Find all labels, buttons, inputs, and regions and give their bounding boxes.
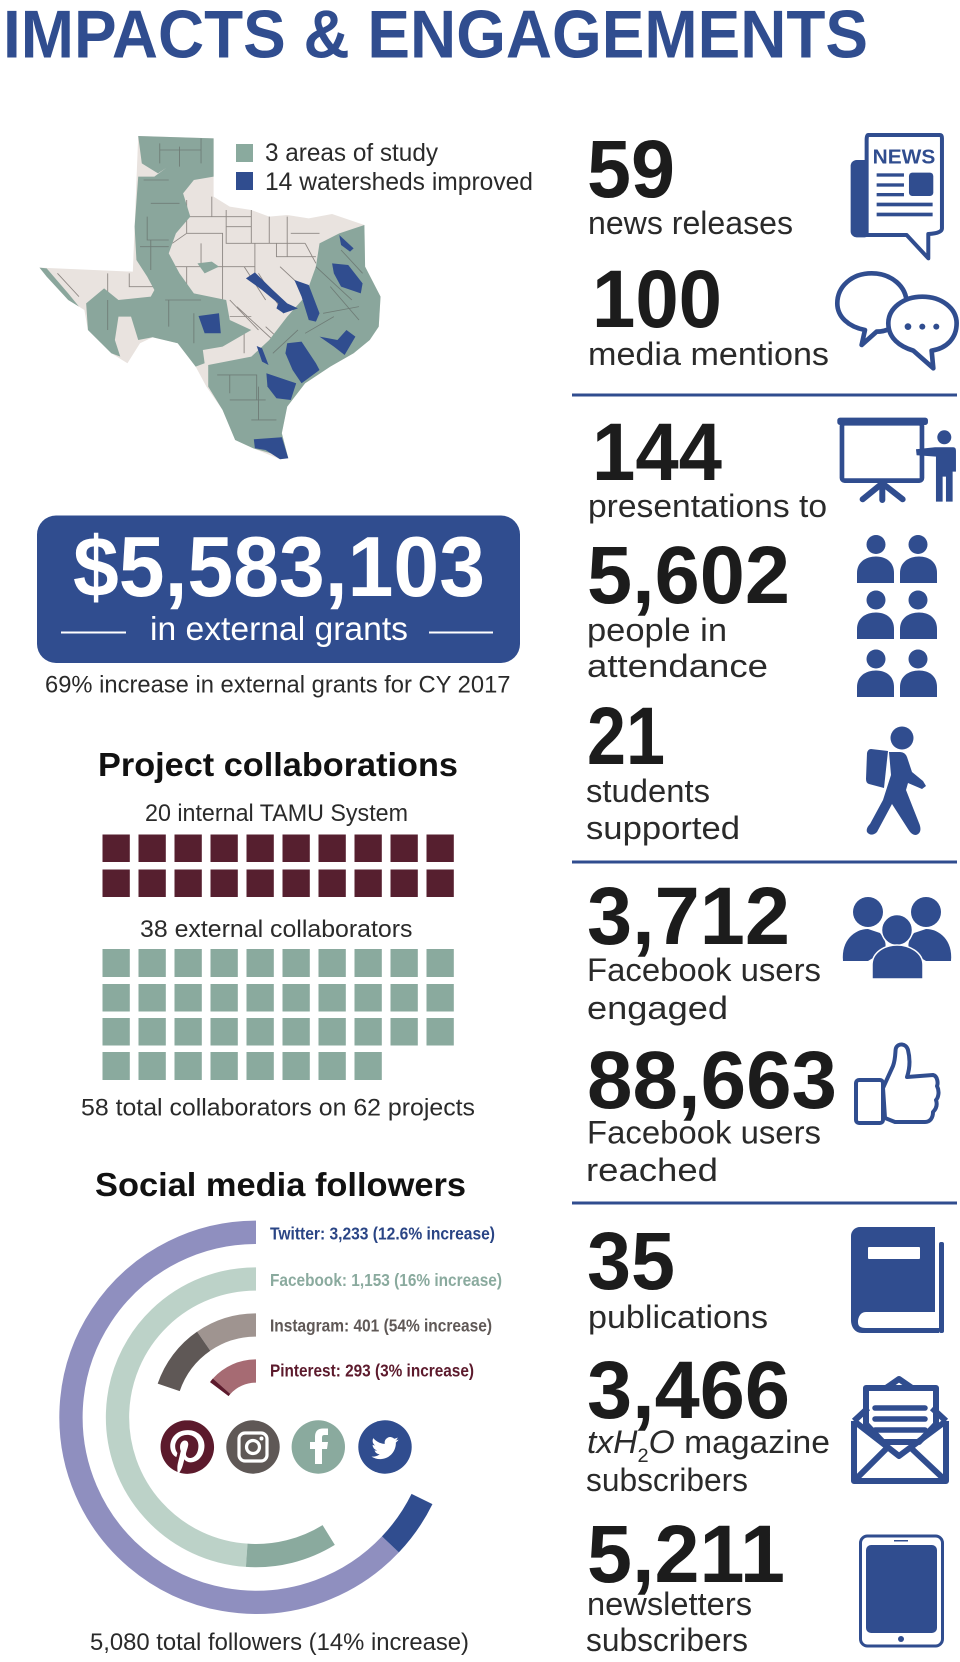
stat: magazine subscribers: O [649,1424,675,1460]
stat: publications: publications [588,1299,768,1335]
stat: Facebook users reached: Facebook users [587,1114,821,1150]
divider [572,394,957,396]
grants increase note: 69% increase in external grants for CY 2017 [45,672,510,698]
stat: attendance: people in [587,612,727,648]
icon: Pinterest [161,1420,214,1474]
label: Instagram followers: Instagram: 401 (54% increase) [270,1316,492,1336]
icon: open envelope with letter [854,1379,946,1481]
icon: newspaper: NEWS [873,145,935,168]
grants caption: in external grants [150,610,408,647]
icon: user group [843,897,951,979]
stat: Facebook users engaged [587,871,821,1026]
stat: attendance [587,530,790,684]
map: Texas areas of study and watersheds [39,136,533,459]
stat: publications: 35 [587,1216,675,1307]
stat: news releases [587,124,793,241]
stat: publications [587,1216,768,1335]
stat: attendance: 5,602 [587,530,790,621]
stat: magazine subscribers [586,1345,830,1498]
icon: Twitter [358,1420,412,1474]
icon: book [851,1227,944,1333]
label: Twitter followers: Twitter: 3,233 (12.6% increase) [270,1224,495,1244]
total collaborators note: 58 total collaborators on 62 projects [81,1094,475,1122]
stat: magazine subscribers: magazine [684,1424,822,1460]
legend: watersheds: 14 watersheds improved [265,168,533,196]
stat: students: supported [586,810,740,846]
grants amount: $5,583,103 [73,520,485,615]
stat: newsletter subscribers: 5,211 [587,1509,785,1600]
icon: tablet [860,1536,942,1646]
stat: magazine subscribers: subscribers [586,1462,748,1498]
stat: media mentions: 100 [592,254,722,345]
stat: Facebook users engaged: engaged [587,990,728,1026]
stat: Facebook users reached: 88,663 [587,1035,837,1126]
arc: Pinterest [219,1371,256,1389]
label: Facebook followers: Facebook: 1,153 (16% increase) [270,1270,502,1290]
stat: newsletter subscribers: subscribers [586,1622,748,1658]
stat: news releases: news releases [588,205,793,241]
stat: magazine subscribers: txH [587,1424,638,1460]
stat: presentations: presentations to [588,488,827,524]
stat: news releases: 59 [587,124,675,215]
waffle: 20 internal collaborators [102,834,454,897]
stat: media mentions [588,254,829,372]
stat: Facebook users engaged: 3,712 [587,871,790,962]
map shapes [39,136,381,459]
stat: students: 21 [587,691,665,782]
arc: Facebook [118,1279,329,1556]
label: Pinterest followers: Pinterest: 293 (3% increase) [270,1360,474,1380]
icon: audience [857,535,937,697]
stat: presentations [588,407,827,524]
waffle: 38 external collaborators [102,949,454,1080]
panel: external grants [37,516,520,663]
heading: social media followers: Social media followers [95,1166,466,1203]
stat: magazine subscribers: 3,466 [587,1345,790,1436]
legend: areas of study: 3 areas of study [265,139,438,167]
stat: students [586,691,740,846]
arc: Twitter [71,1232,422,1602]
stat: newsletter subscribers [586,1509,785,1658]
stat: media mentions: media mentions [588,336,829,372]
heading: project collaborations: Project collaborations [98,746,458,783]
divider [572,860,957,864]
label: internal collaborators: 20 internal TAMU System [145,800,408,827]
stat: students: students [586,773,710,809]
icon: Facebook [292,1420,345,1474]
stat: newsletter subscribers: newsletters [587,1586,752,1622]
icon: student walking [866,726,926,835]
stat: Facebook users engaged: Facebook users [587,952,821,988]
icon: thumbs up [856,1044,939,1123]
stat: magazine subscribers: 2 [637,1446,649,1467]
arc: Instagram [169,1325,256,1387]
stat: presentations: 144 [592,407,722,498]
label: external collaborators: 38 external collaborators [140,916,412,943]
icon: presenter at screen [837,418,956,502]
stat: Facebook users reached [586,1035,837,1188]
icon: newspaper [851,135,942,258]
divider [572,1202,957,1204]
icon: speech bubbles [837,273,957,368]
chart: social media radial bars [71,1232,422,1602]
total followers note: 5,080 total followers (14% increase) [90,1629,469,1656]
icon: Instagram [226,1420,280,1474]
stat: attendance: attendance [587,648,768,684]
stat: Facebook users reached: reached [586,1152,718,1188]
